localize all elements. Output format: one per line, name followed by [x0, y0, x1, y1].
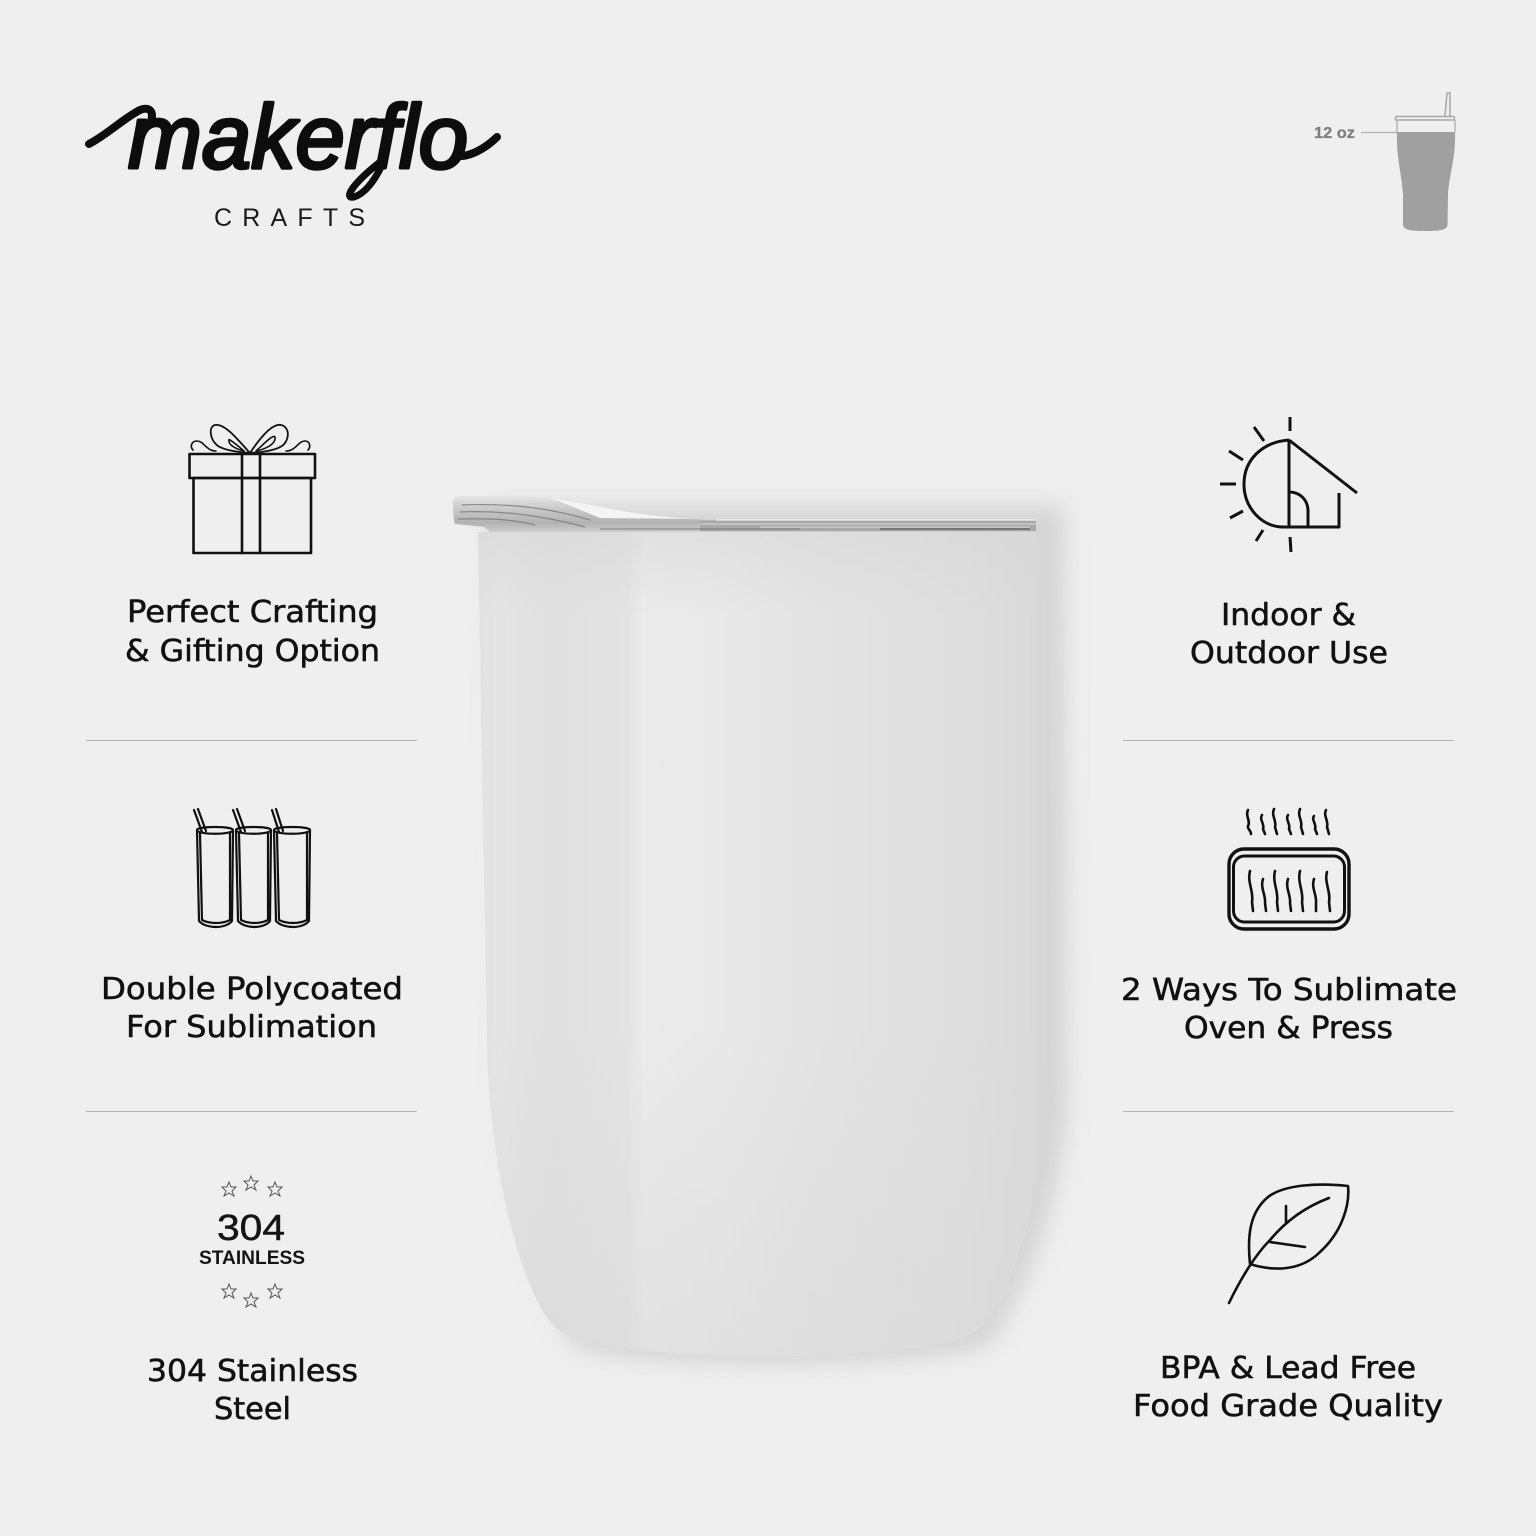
feature text	[1190, 598, 1388, 671]
feature: crafting and gifting	[125, 425, 380, 669]
feature text	[147, 1354, 358, 1427]
tumbler shadow	[490, 505, 1068, 1364]
badge number: 304	[217, 1207, 285, 1248]
feature text: Outdoor Use	[1190, 636, 1388, 671]
feature text: BPA & Lead Free	[1160, 1351, 1416, 1386]
capacity label: 12 oz	[1314, 125, 1355, 142]
feature: indoor and outdoor use	[1190, 417, 1388, 671]
size indicator: 12 oz	[1314, 93, 1455, 231]
feature text: Oven & Press	[1184, 1011, 1393, 1046]
icon: 304 stainless badge	[199, 1176, 305, 1307]
feature text: Perfect Crafting	[127, 595, 378, 630]
feature: BPA and lead free	[1133, 1185, 1443, 1424]
feature text: Food Grade Quality	[1133, 1389, 1443, 1424]
feature: double polycoated	[101, 809, 403, 1045]
clear lid	[453, 496, 1036, 532]
logo wordmark: makerflo	[128, 88, 468, 188]
icon: oven tray with heat	[1229, 809, 1349, 929]
feature text: Double Polycoated	[101, 972, 403, 1007]
product photo: white tumbler with clear lid	[453, 496, 1068, 1364]
feature text	[101, 972, 403, 1045]
tumbler body	[478, 532, 1050, 1356]
feature text: 2 Ways To Sublimate	[1121, 973, 1457, 1008]
logo: makerflo crafts	[89, 88, 497, 232]
logo subtitle: CRAFTS	[214, 204, 365, 232]
feature text: Indoor &	[1221, 598, 1356, 633]
feature: two ways to sublimate	[1121, 809, 1457, 1046]
feature text	[1121, 973, 1457, 1046]
feature text: For Sublimation	[126, 1010, 377, 1045]
feature: 304 stainless steel	[147, 1176, 358, 1427]
feature text: Steel	[214, 1392, 291, 1427]
feature text: & Gifting Option	[125, 634, 380, 669]
badge stars	[222, 1176, 282, 1307]
feature text: 304 Stainless	[147, 1354, 358, 1389]
feature text	[125, 595, 380, 669]
icon: three skinny tumblers	[194, 809, 310, 927]
icon: gift box	[190, 425, 315, 553]
feature text	[1133, 1351, 1443, 1424]
icon: sun and house	[1220, 417, 1357, 552]
badge word: STAINLESS	[199, 1247, 305, 1269]
icon: tumbler silhouette	[1396, 93, 1455, 231]
icon: leaf	[1229, 1185, 1348, 1303]
